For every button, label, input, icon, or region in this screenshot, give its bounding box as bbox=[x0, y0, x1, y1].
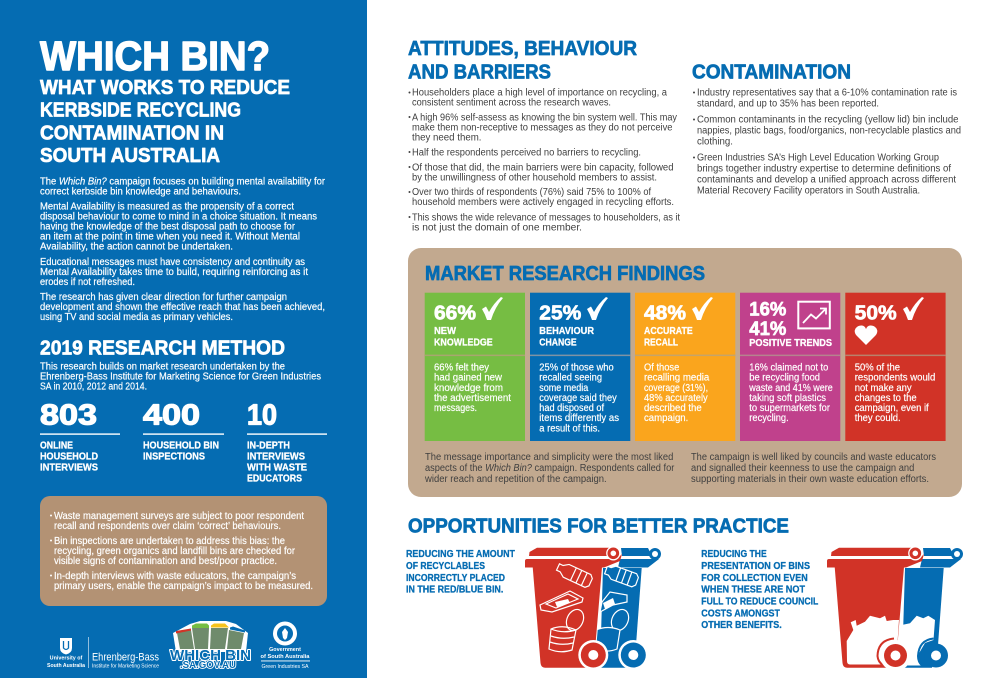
text block: attitudes bullets: household members were actively engaged in recycling efforts. bbox=[412, 197, 674, 208]
card: accurate recall: RECALL bbox=[644, 337, 678, 349]
card: positive trends: 41% bbox=[749, 319, 786, 340]
text block: contamination bullets: clothing. bbox=[697, 137, 733, 148]
text block: most liked aspects: The message importance and simplicity were the most liked bbox=[425, 452, 673, 463]
card: behaviour change: 25% bbox=[539, 302, 582, 324]
card: behaviour change bbox=[530, 293, 630, 441]
text block: campaign introduction: The Which Bin? campaign focuses on building mental availability for bbox=[40, 176, 326, 188]
text block: research background bbox=[40, 362, 321, 392]
text block: campaign introduction bbox=[40, 176, 326, 323]
callout: survey method notes: recycling, green organics and landfill bins are checked for bbox=[54, 546, 296, 557]
title: KERBSIDE RECYCLING bbox=[40, 98, 241, 122]
text block: campaign introduction: having the knowledge of the best disposal path to choose for bbox=[40, 222, 296, 232]
stat: 10 in-depth interviews: INTERVIEWS bbox=[247, 451, 305, 463]
text block: contamination bullets: standard, and up to 35% has been reported. bbox=[697, 99, 879, 110]
card: accurate recall: recalling media bbox=[644, 373, 710, 384]
stat: 400 household bin inspections: 400 bbox=[143, 400, 200, 432]
stat: 803 online household interviews: INTERVIEWS bbox=[40, 462, 98, 474]
card: positive trends bbox=[740, 293, 840, 441]
card: new knowledge: the advertisement bbox=[434, 393, 511, 404]
logo: Government of South Australia, Green Industries SA: of South Australia bbox=[260, 654, 311, 660]
text block: councils and educators bbox=[691, 452, 936, 485]
card: behaviour change: CHANGE bbox=[539, 337, 577, 349]
text block: attitudes bullets: Half the respondents perceived no barriers to recycling. bbox=[412, 147, 641, 158]
card: accurate recall: campaign. bbox=[644, 413, 688, 424]
stat: 10 in-depth interviews: WITH WASTE bbox=[247, 462, 307, 474]
text block: attitudes bullets: This shows the wide relevance of messages to householders, as it bbox=[412, 212, 680, 223]
stat: 10 in-depth interviews: 10 bbox=[247, 400, 277, 432]
text block: campaign introduction: Mental Availability is measured as the propensity of a correct bbox=[40, 202, 294, 212]
logo: University of South Australia and Ehrenberg-Bass bbox=[47, 637, 159, 670]
logo: University of South Australia and Ehrenberg-Bass: South Australia bbox=[47, 663, 86, 669]
heading: attitudes bbox=[408, 38, 638, 84]
heading: attitudes: ATTITUDES, BEHAVIOUR bbox=[408, 38, 638, 60]
callout: survey method notes: primary users, enable the campaign’s impact to be measured. bbox=[54, 581, 313, 592]
heading: 2019 research method: 2019 RESEARCH METHOD bbox=[40, 336, 285, 360]
panel: market research findings bbox=[408, 248, 962, 497]
card: new knowledge: 66% felt they bbox=[434, 363, 489, 374]
text block: attitudes bullets: make them non-receptive to messages as they do not perceive bbox=[412, 122, 673, 133]
callout: survey method notes: Waste management surveys are subject to poor respondent bbox=[54, 511, 304, 522]
stat: 400 household bin inspections: INSPECTIONS bbox=[143, 451, 205, 463]
logo: University of South Australia and Ehrenberg-Bass: University of bbox=[50, 656, 83, 662]
text block: campaign introduction: correct kerbside bin knowledge and behaviours. bbox=[40, 186, 241, 198]
text block: attitudes bullets: consistent sentiment across the research waves. bbox=[412, 98, 611, 109]
title: CONTAMINATION IN bbox=[40, 122, 224, 144]
text block: contamination bullets: nappies, plastic bags, food/organics, non-recyclable plastics and bbox=[697, 126, 961, 137]
icon: rising trend chart bbox=[798, 302, 830, 328]
card: campaign approval: respondents would bbox=[855, 373, 935, 384]
text block: campaign introduction: an item at the point in time when you need it. Without Mental bbox=[40, 232, 300, 242]
text block: reducing bin presentation: FOR COLLECTION EVEN bbox=[701, 572, 808, 584]
icon: heart bbox=[855, 325, 877, 345]
callout: survey method notes bbox=[40, 496, 327, 606]
text block: campaign introduction: development and shown the effective reach that has been achieved, bbox=[40, 302, 325, 313]
section: attitudes, behaviour and barriers bbox=[408, 38, 680, 233]
text block: reducing recyclables: OF RECYCLABLES bbox=[406, 560, 485, 572]
card: behaviour change: items differently as bbox=[539, 413, 619, 424]
card: behaviour change: BEHAVIOUR bbox=[539, 325, 594, 337]
title: WHAT WORKS TO REDUCE bbox=[40, 76, 290, 99]
section: contamination bbox=[692, 62, 961, 197]
text block: councils and educators: and signalled their keenness to use the campaign and bbox=[691, 463, 914, 474]
card: campaign approval: 50% of the bbox=[855, 363, 900, 374]
title: WHICH BIN? bbox=[40, 33, 270, 79]
card: new knowledge: messages. bbox=[434, 403, 477, 414]
heading: attitudes: AND BARRIERS bbox=[408, 62, 551, 84]
stat: 10 in-depth interviews: EDUCATORS bbox=[247, 473, 302, 485]
card: campaign approval bbox=[845, 293, 946, 441]
card: campaign approval: campaign, even if bbox=[855, 403, 929, 414]
text block: contamination bullets: brings together industry expertise to determine definitions of bbox=[697, 164, 951, 175]
text block: contamination bullets: Green Industries SA’s High Level Education Working Group bbox=[697, 153, 939, 164]
stat: 400 household bin inspections bbox=[143, 400, 224, 463]
text block: contamination bullets: contaminants and develop a unified approach across different bbox=[697, 175, 956, 186]
icon: red and blue bins with recyclables bbox=[525, 547, 661, 670]
logo: Government of South Australia, Green Industries SA bbox=[260, 622, 311, 670]
callout: survey method notes: recall and respondents over claim ‘correct’ behaviours. bbox=[54, 521, 281, 532]
card: behaviour change: recalled seeing bbox=[539, 373, 602, 384]
text block: reducing recyclables: REDUCING THE AMOUNT bbox=[406, 548, 515, 560]
text block: attitudes bullets bbox=[408, 88, 680, 233]
card: positive trends: 16% bbox=[749, 300, 786, 321]
callout: survey method notes: In-depth interviews with waste educators, the campaign’s bbox=[54, 571, 296, 582]
card: behaviour change: some media bbox=[539, 383, 589, 394]
card: campaign approval: 50% bbox=[855, 302, 897, 324]
heading: contamination: CONTAMINATION bbox=[692, 62, 851, 84]
logo: University of South Australia and Ehrenberg-Bass: Ehrenberg-Bass bbox=[92, 652, 159, 664]
card: accurate recall: Of those bbox=[644, 363, 680, 374]
text block: reducing bin presentation: PRESENTATION OF BINS bbox=[701, 560, 810, 572]
heading: market research findings: MARKET RESEARCH FINDINGS bbox=[425, 263, 705, 285]
text block: research background: Ehrenberg-Bass Institute for Marketing Science for Green Industries bbox=[40, 372, 321, 382]
logo: Government of South Australia, Green Industries SA: Government bbox=[269, 647, 301, 653]
card: behaviour change: a result of this. bbox=[539, 423, 600, 434]
stat: 803 online household interviews: 803 bbox=[40, 400, 97, 432]
card: accurate recall: 48% accurately bbox=[644, 393, 708, 404]
text block: campaign introduction: Availability, the action cannot be undertaken. bbox=[40, 242, 233, 253]
text block: reducing recyclables: IN THE RED/BLUE BIN. bbox=[406, 584, 503, 596]
card: positive trends: POSITIVE TRENDS bbox=[749, 337, 832, 349]
text block: campaign introduction: using TV and social media as primary vehicles. bbox=[40, 312, 233, 323]
card: positive trends: recycling. bbox=[749, 413, 789, 424]
card: accurate recall: 48% bbox=[644, 302, 686, 324]
text block: campaign introduction: Educational messages must have consistency and continuity as bbox=[40, 257, 305, 268]
logo: Government of South Australia, Green Industries SA: Green Industries SA bbox=[262, 664, 309, 670]
stat: 803 online household interviews: HOUSEHOLD bbox=[40, 451, 98, 463]
text block: attitudes bullets: Over two thirds of respondents (76%) said 75% to 100% of bbox=[412, 187, 651, 198]
card: positive trends: 16% claimed not to bbox=[749, 363, 829, 374]
text block: reducing bin presentation: REDUCING THE bbox=[701, 548, 767, 560]
text block: contamination bullets: Industry representatives say that a 6-10% contamination rate is bbox=[697, 88, 957, 99]
text block: councils and educators: supporting materials in their own waste education efforts. bbox=[691, 474, 929, 485]
text block: reducing bin presentation: COSTS AMONGST bbox=[701, 608, 780, 620]
text block: campaign introduction: The research has given clear direction for further campaign bbox=[40, 292, 287, 303]
stat: 803 online household interviews bbox=[40, 400, 120, 474]
card: behaviour change: coverage said they bbox=[539, 393, 617, 404]
card: campaign approval: changes to the bbox=[855, 393, 917, 404]
text block: contamination bullets bbox=[693, 88, 961, 197]
card: campaign approval: they could. bbox=[855, 413, 901, 424]
card: positive trends: be recycling food bbox=[749, 373, 820, 384]
text block: attitudes bullets: they need them. bbox=[412, 132, 482, 143]
card: accurate recall: coverage (31%), bbox=[644, 383, 708, 394]
callout: survey method notes: Bin inspections are undertaken to address this bias: the bbox=[54, 536, 285, 547]
text block: research background: SA in 2010, 2012 and 2014. bbox=[40, 382, 147, 392]
card: positive trends: to supermarkets for bbox=[749, 403, 831, 414]
card: positive trends: taking soft plastics bbox=[749, 393, 826, 404]
text block: attitudes bullets: A high 96% self-assess as knowing the bin system well. This may bbox=[412, 112, 677, 123]
text block: contamination bullets: Material Recovery Facility operators in South Australia. bbox=[697, 186, 920, 197]
card: positive trends: waste and 41% were bbox=[748, 383, 833, 394]
logo: whichbin.sa.gov.au bbox=[170, 621, 251, 671]
card: accurate recall bbox=[635, 293, 735, 441]
stat: 400 household bin inspections: HOUSEHOLD BIN bbox=[143, 440, 219, 452]
text block: attitudes bullets: Householders place a high level of importance on recycling, a bbox=[412, 88, 667, 99]
text block: research background: This research builds on market research undertaken by the bbox=[40, 362, 285, 372]
card: new knowledge: had gained new bbox=[434, 373, 503, 384]
text block: campaign introduction: erodes if not refreshed. bbox=[40, 277, 135, 288]
title bbox=[40, 33, 290, 167]
text block: most liked aspects: wider reach and repetition of the campaign. bbox=[424, 474, 607, 485]
card: new knowledge bbox=[425, 293, 525, 441]
card: behaviour change: 25% of those who bbox=[539, 363, 614, 374]
card: new knowledge: NEW bbox=[434, 325, 456, 337]
card: new knowledge: 66% bbox=[434, 302, 476, 324]
card: accurate recall: described the bbox=[644, 403, 702, 414]
icon: red and blue bins part full bbox=[827, 547, 963, 671]
text block: reducing bin presentation: OTHER BENEFITS. bbox=[701, 619, 782, 631]
callout: survey method notes: visible signs of contamination and best/poor practice. bbox=[54, 556, 277, 567]
panel: left blue column bbox=[0, 0, 367, 678]
card: new knowledge: knowledge from bbox=[434, 383, 503, 394]
text block: most liked aspects bbox=[424, 452, 675, 485]
text block: reducing recyclables bbox=[406, 548, 515, 596]
text block: reducing bin presentation bbox=[701, 548, 819, 631]
stat: 803 online household interviews: ONLINE bbox=[40, 440, 73, 452]
text block: councils and educators: The campaign is well liked by councils and waste educators bbox=[691, 452, 936, 463]
text block: attitudes bullets: by the unwillingness of other household members to assist. bbox=[412, 172, 657, 183]
card: campaign approval: not make any bbox=[855, 383, 912, 394]
text block: reducing recyclables: INCORRECTLY PLACED bbox=[406, 572, 505, 584]
logo: whichbin.sa.gov.au: WHICH BIN bbox=[170, 647, 251, 664]
stat: 10 in-depth interviews bbox=[247, 400, 327, 485]
text block: attitudes bullets: is not just the domain of one member. bbox=[412, 222, 582, 233]
text block: attitudes bullets: Of those that did, the main barriers were bin capacity, followed bbox=[412, 162, 674, 173]
text block: campaign introduction: disposal behaviour to come to mind in a choice situation. It means bbox=[40, 212, 317, 222]
text block: reducing bin presentation: FULL TO REDUCE COUNCIL bbox=[701, 596, 819, 608]
logo: University of South Australia and Ehrenberg-Bass: Institute for Marketing Science bbox=[92, 664, 159, 670]
stat: 10 in-depth interviews: IN-DEPTH bbox=[247, 440, 290, 452]
card: behaviour change: had disposed of bbox=[539, 403, 604, 414]
title: SOUTH AUSTRALIA bbox=[40, 144, 220, 167]
text block: reducing bin presentation: WHEN THESE ARE NOT bbox=[701, 584, 806, 596]
heading: opportunities for better practice: OPPORTUNITIES FOR BETTER PRACTICE bbox=[408, 515, 789, 537]
card: accurate recall: ACCURATE bbox=[644, 325, 693, 337]
logo: whichbin.sa.gov.au: .SA.GOV.AU bbox=[180, 660, 236, 671]
text block: campaign introduction: Mental Availability takes time to build, requiring reinforcing as it bbox=[40, 267, 308, 278]
text block: contamination bullets: Common contaminants in the recycling (yellow lid) bin include bbox=[697, 115, 959, 126]
card: new knowledge: KNOWLEDGE bbox=[434, 337, 493, 349]
text block: most liked aspects: aspects of the Which Bin? campaign. Respondents called for bbox=[425, 463, 675, 474]
